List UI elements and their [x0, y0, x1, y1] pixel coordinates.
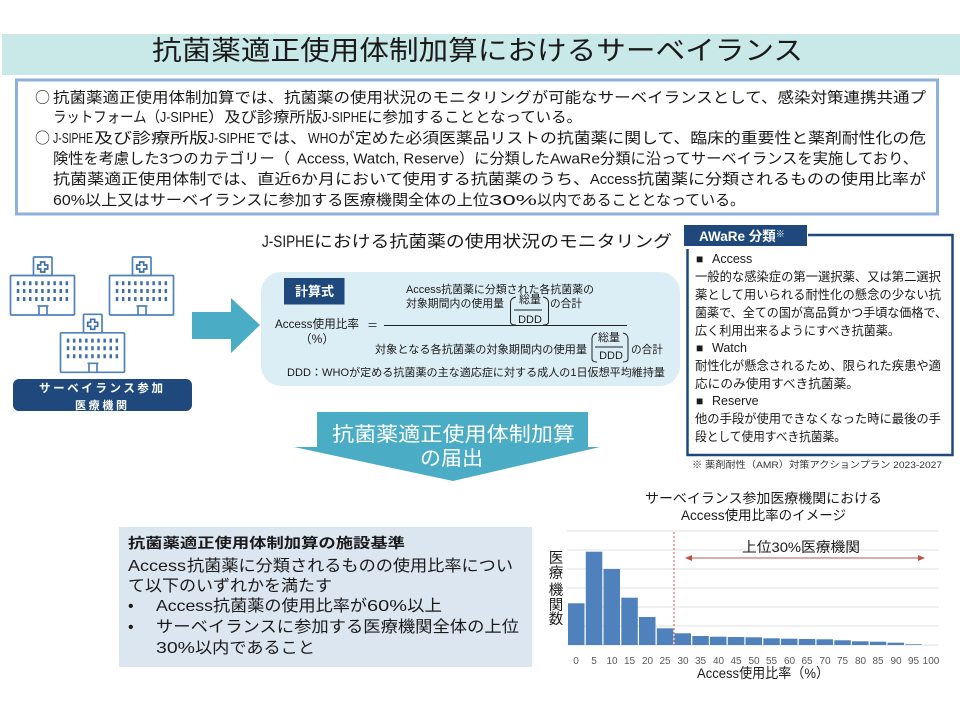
heading: monitoring: J-SIPHE [262, 233, 314, 251]
range label: 上位30%医療機関 [742, 539, 860, 555]
x axis labels: 75 [837, 656, 848, 667]
x axis labels: 15 [624, 656, 635, 667]
x axis labels: 100 [923, 656, 940, 667]
panel: overview text: 及び診療所版 [94, 130, 208, 147]
panel: facility criteria: 抗菌薬適正使用体制加算の施設基準 [128, 535, 405, 551]
panel: overview text: 抗菌薬適正使用体制加算では、抗菌薬の使用状況のモニタリングが可能なサーベイランスとして、感染対策連携共通プ [53, 88, 926, 106]
x axis labels: 90 [890, 656, 902, 667]
panel: overview text: 険性を考慮した3つのカテゴリー（ [53, 150, 290, 168]
panel: overview text: ○ [35, 86, 50, 108]
panel: facility criteria: 60% [367, 598, 407, 615]
x axis labels: 0 [573, 656, 579, 667]
AWaRe text: 菌薬で、全ての国が高品質かつ手頃な価格で、 [695, 305, 947, 320]
panel: overview text: では、 [256, 130, 307, 147]
AWaRe text: Watch [712, 341, 747, 355]
x axis labels: 25 [659, 656, 671, 667]
panel: overview text: ）に分類した [459, 150, 550, 168]
threshold line [673, 532, 675, 645]
AWaRe text: 広く利用出来るようにすべき抗菌薬。 [695, 324, 900, 338]
formula text: 対象となる各抗菌薬の対象期間内の使用量 [375, 342, 587, 356]
panel: facility criteria: 30% [156, 640, 195, 657]
AWaRe text: ■ [696, 252, 703, 266]
header: AWaRe: ※ [776, 229, 785, 239]
label: formula: 計算式 [295, 284, 334, 299]
AWaRe text: 他の手段が使用できなくなった時に最後の手 [695, 411, 941, 426]
header: AWaRe [684, 225, 807, 246]
x axis labels: 80 [855, 656, 866, 667]
x axis labels: 5 [591, 656, 597, 667]
x axis labels: 50 [748, 656, 760, 667]
x axis labels: 10 [606, 656, 618, 667]
y axis label: 関 [549, 598, 563, 614]
x axis labels: 85 [872, 656, 884, 667]
formula text: 対象期間内の使用量 [406, 296, 504, 310]
y axis label: 数 [549, 611, 564, 628]
AWaRe text: Reserve [712, 394, 759, 408]
x axis labels: 45 [730, 656, 742, 667]
footnote: ※ 薬剤耐性（AMR）対策アクションプラン 2023-2027 [692, 459, 942, 471]
panel: overview text: Access [590, 171, 637, 188]
x axis labels [573, 656, 940, 667]
x axis labels: 70 [819, 656, 831, 667]
x axis labels: 40 [713, 656, 724, 667]
formula text: Access抗菌薬に分類された各抗菌薬の [406, 282, 594, 296]
panel: overview text: 30% [489, 192, 537, 209]
panel: overview text: 以上又はサーベイランスに参加する医療機関全体の上位 [85, 192, 489, 209]
chart title: Access使用比率のイメージ [681, 507, 846, 523]
panel: facility criteria: 以上 [407, 597, 442, 615]
panel: facility criteria: サーベイランスに参加する医療機関全体の上位 [156, 618, 519, 636]
panel: overview text: ）及び診療所版 [208, 109, 322, 126]
panel: overview text: 抗菌薬に分類されるものの使用比率が [637, 171, 926, 188]
formula text: DDD [599, 350, 623, 362]
x axis labels: 20 [642, 656, 653, 667]
panel: overview text: 60% [53, 192, 85, 209]
chart title: サーベイランス参加医療機関における [645, 491, 882, 506]
panel: overview text: 分類に沿ってサーベイランスを実施しており、 [600, 150, 918, 168]
panel: facility criteria: • [128, 598, 134, 615]
AWaRe text: Access [712, 252, 752, 266]
panel: overview text: ○ [35, 127, 50, 148]
x axis labels: 35 [695, 656, 706, 667]
panel: facility criteria: 抗菌薬に分類されるものの使用比率につい [187, 557, 513, 575]
AWaRe text: 一般的な感染症の第一選択薬、又は第二選択 [695, 269, 941, 284]
arrow: notification [294, 412, 600, 481]
panel: overview text [16, 80, 938, 214]
panel: overview text: 抗菌薬適正使用体制では、直近6か月において使用する抗菌薬のうち、 [53, 171, 590, 188]
formula text [275, 282, 665, 379]
y axis label: 機 [549, 582, 564, 599]
heading: monitoring: における抗菌薬の使用状況のモニタリング [314, 232, 672, 251]
label: participating institutions [13, 379, 192, 412]
y axis label [549, 551, 564, 628]
bar chart [567, 531, 940, 667]
panel: overview text: に参加することとなっている。 [367, 109, 582, 126]
header: AWaRe: AWaRe 分類 [699, 229, 776, 244]
formula text: の合計 [550, 296, 582, 310]
x axis labels: 95 [908, 656, 919, 667]
panel: AWaRe classification [684, 225, 952, 455]
panel: overview text: 以内であることとなっている。 [537, 192, 745, 209]
panel: facility criteria: • [128, 619, 134, 636]
panel: facility criteria: Access [128, 558, 186, 575]
formula text: Access使用比率 [275, 316, 359, 331]
AWaRe text: 耐性化が懸念されるため、限られた疾患や適 [695, 358, 941, 373]
panel: facility criteria: て以下のいずれかを満たす [128, 577, 332, 595]
formula text: 総量 [519, 292, 541, 306]
panel: overview text: WHO [308, 130, 338, 147]
y axis label: 療 [549, 565, 564, 582]
formula text: DDD：WHOが定める抗菌薬の主な適応症に対する成人の1日仮想平均維持量 [287, 365, 665, 379]
AWaRe text: 段として使用すべき抗菌薬。 [695, 429, 846, 444]
panel: facility criteria [119, 527, 532, 667]
AWaRe text: ■ [696, 394, 703, 408]
formula text: の合計 [631, 342, 663, 356]
icon: hospitals [10, 257, 174, 372]
chart title [645, 491, 882, 523]
AWaRe text: 薬として用いられる耐性化の懸念の少ない抗 [695, 288, 941, 302]
arrow: right [192, 298, 260, 353]
AWaRe text: 応にのみ使用すべき抗菌薬。 [695, 376, 859, 391]
panel: overview text: J-SIPHE [53, 130, 93, 147]
panel: overview text: J-SIPHE [160, 109, 208, 126]
panel: overview text: Access, Watch, Reserve [297, 150, 459, 168]
formula text: （%） [300, 332, 334, 346]
title [2, 34, 960, 75]
label: formula [284, 278, 344, 304]
label: participating institutions: 医療機関 [75, 398, 127, 412]
y axis label: 医 [549, 551, 563, 567]
x axis labels: 65 [801, 656, 813, 667]
formula text: ＝ [367, 320, 378, 332]
title: 抗菌薬適正使用体制加算におけるサーベイランス [152, 36, 803, 66]
panel: facility criteria: 抗菌薬の使用比率が [213, 597, 367, 615]
formula text: DDD [518, 314, 542, 326]
formula text: 総量 [598, 330, 620, 344]
panel: overview text: J-SIPHE [208, 130, 255, 147]
AWaRe text [695, 252, 947, 444]
label: participating institutions: サーベイランス参加 [39, 381, 163, 395]
panel: overview text: が定めた必須医薬品リストの抗菌薬に関して、臨床的重要性と薬剤耐性化の危 [338, 130, 926, 147]
panel: overview text: AwaRe [550, 150, 600, 168]
panel: formula [261, 272, 680, 386]
panel: overview text: ラットフォーム（ [53, 109, 160, 126]
panel: facility criteria: 以内であること [195, 639, 315, 657]
x axis title: Access使用比率（%） [697, 665, 829, 681]
AWaRe text: ■ [696, 341, 703, 355]
x axis labels: 55 [766, 656, 777, 667]
panel: overview text: J-SIPHE [322, 109, 367, 126]
x axis labels: 30 [677, 656, 689, 667]
arrow: notification: 抗菌薬適正使用体制加算 [332, 423, 575, 446]
x axis labels: 60 [784, 656, 795, 667]
panel: facility criteria: Access [156, 598, 213, 615]
range arrow [685, 555, 925, 561]
arrow: notification: の届出 [420, 447, 483, 470]
